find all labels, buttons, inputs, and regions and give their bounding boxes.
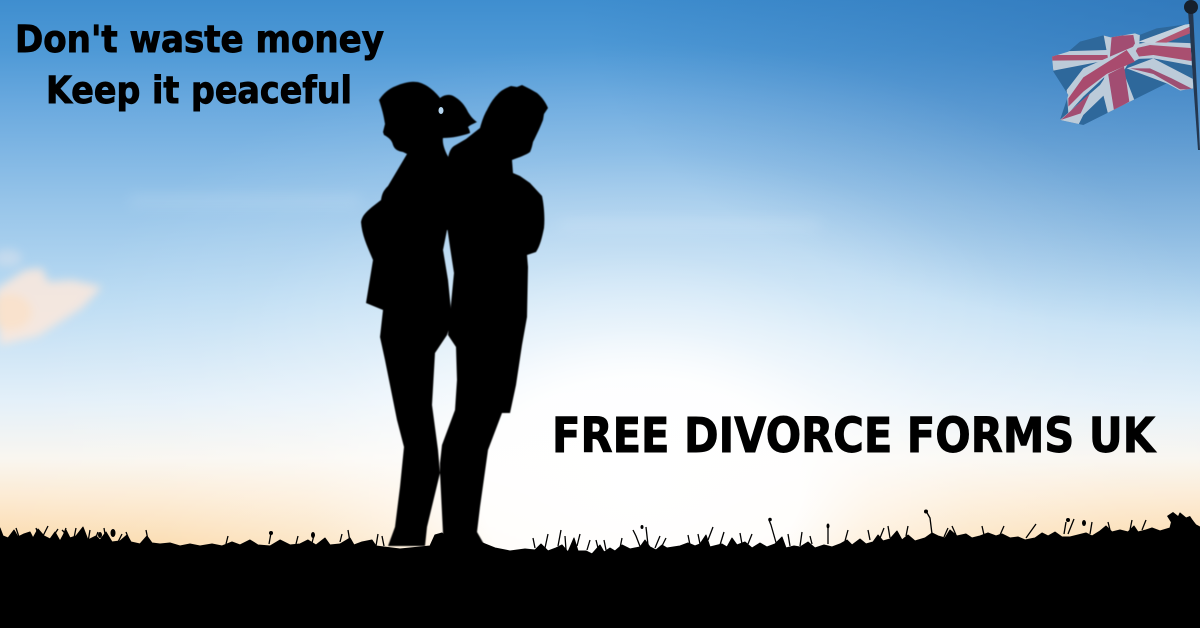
flag pole (1184, 0, 1200, 150)
cloud (0, 249, 102, 345)
woman (361, 82, 477, 546)
headline: don't waste money: Don't waste money (15, 18, 384, 61)
man (440, 85, 548, 546)
grass horizon (0, 510, 1200, 628)
headline: keep it peaceful: Keep it peaceful (46, 69, 352, 112)
grass blades and seed stalks (16, 511, 1146, 550)
ponytail gap (438, 107, 444, 114)
silhouette: couple standing back to back (361, 82, 548, 546)
union jack flag (1052, 24, 1194, 125)
